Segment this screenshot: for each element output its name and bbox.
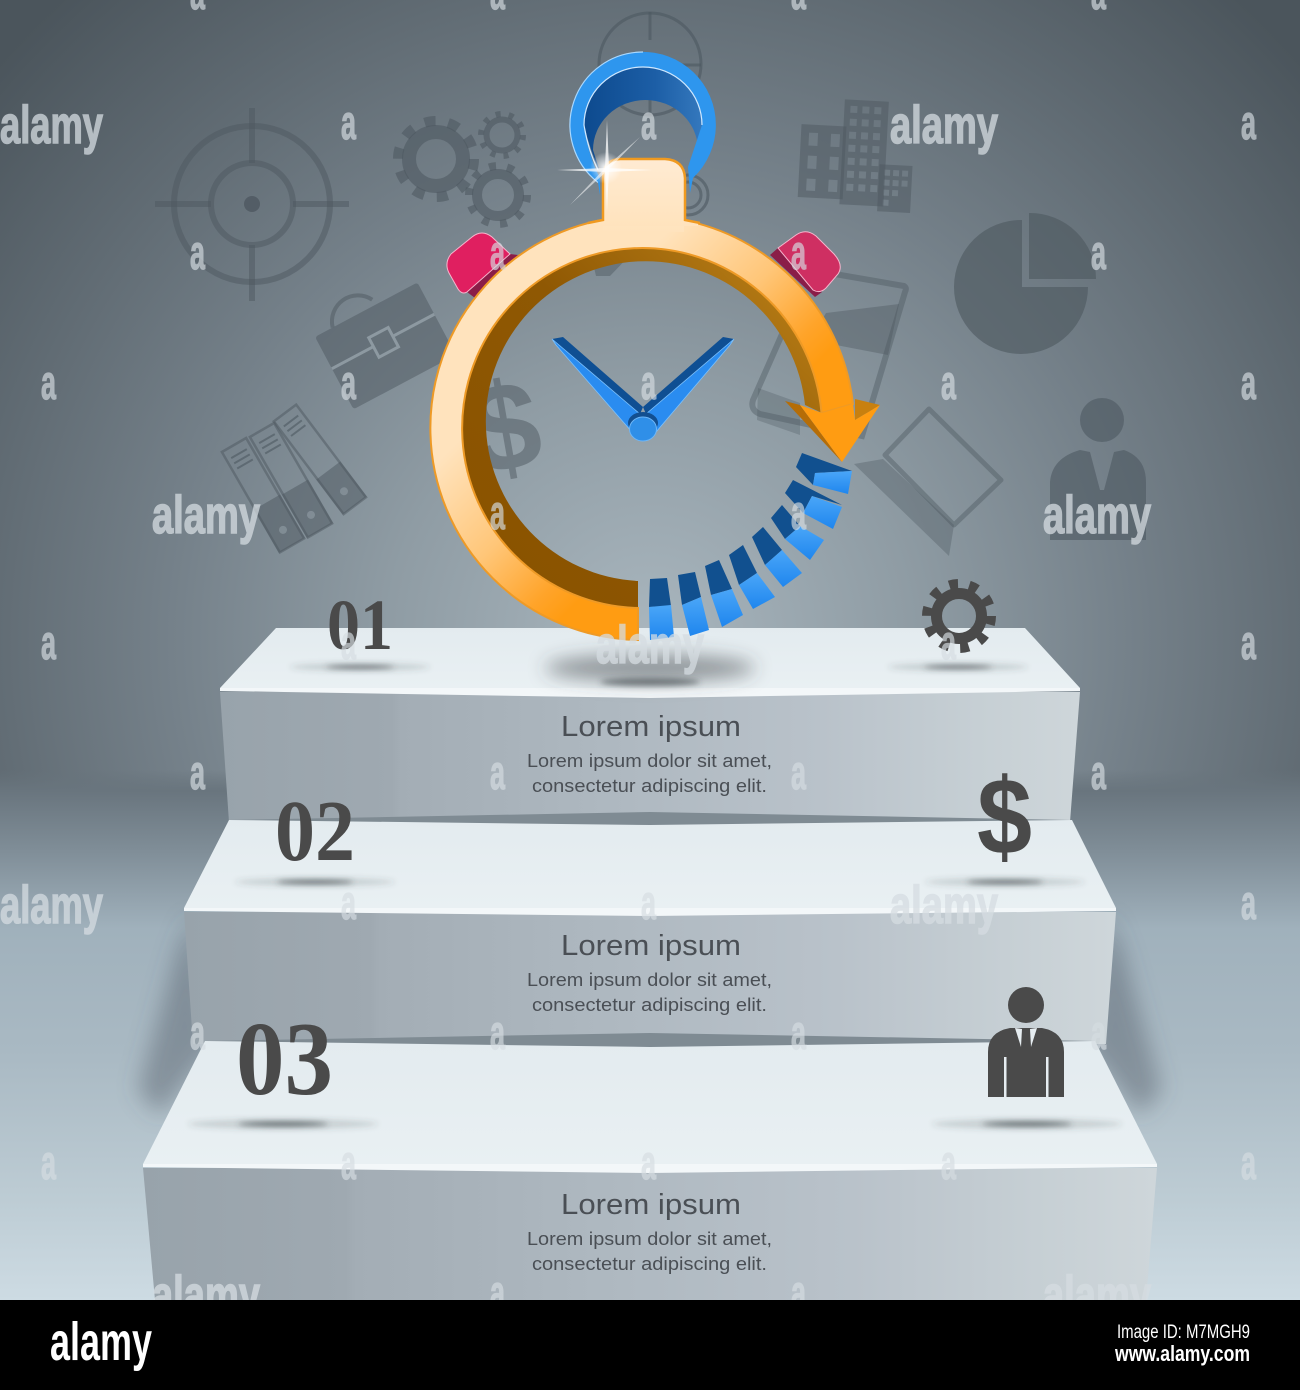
icon: target	[155, 108, 349, 301]
text block: step 3	[527, 1189, 772, 1274]
stem	[588, 159, 700, 232]
icon: gear on step 1	[928, 585, 990, 647]
text block: step 3: Lorem ipsum dolor sit amet,	[527, 1228, 772, 1249]
watermark wordmarks	[0, 96, 1151, 1325]
watermark small letters: a	[41, 357, 56, 410]
watermark small letters: a	[941, 357, 956, 410]
watermark wordmarks: alamy	[890, 876, 998, 935]
watermark small letters: a	[1091, 1007, 1106, 1060]
watermark small letters: a	[341, 877, 356, 930]
step 1	[220, 628, 1080, 822]
ring inner wall	[463, 248, 822, 608]
numeral 02: 02	[275, 782, 355, 879]
ring front face	[430, 216, 853, 640]
watermark small letters: a	[1241, 97, 1256, 150]
watermark small letters: a	[941, 1137, 956, 1190]
watermark small letters: a	[791, 487, 806, 540]
icon: pie chart	[954, 213, 1096, 354]
background floor	[0, 770, 1300, 1300]
soft shadows on treads	[188, 654, 1122, 1129]
icon: dollar on step 2: $	[977, 756, 1032, 878]
clock hands	[552, 337, 734, 441]
icon: businessman faded	[1050, 398, 1146, 540]
watermark small letters: a	[490, 1267, 505, 1320]
stopwatch crown	[570, 52, 716, 195]
watermark wordmarks: alamy	[152, 486, 260, 545]
watermark small letters: a	[41, 1137, 56, 1190]
footer url: www.alamy.com	[1114, 1341, 1250, 1366]
watermark small letters: a	[641, 1137, 656, 1190]
watermark wordmarks: alamy	[1043, 1266, 1151, 1325]
text block: step 2: consectetur adipiscing elit.	[532, 994, 767, 1015]
step 3 front face	[143, 1168, 1157, 1300]
watermark small letters: a	[1241, 1137, 1256, 1190]
watermark small letters: a	[641, 97, 656, 150]
step 2 front face	[184, 912, 1116, 1044]
footer logo: alamy	[50, 1312, 152, 1372]
watermark small letters: a	[341, 617, 356, 670]
watermark wordmarks: alamy	[890, 96, 998, 155]
text block: step 2	[527, 930, 772, 1015]
text block: step 3: Lorem ipsum	[561, 1189, 741, 1221]
watermark wordmarks: alamy	[0, 876, 103, 935]
watermark small letters: a	[190, 1007, 205, 1060]
stair side shadows	[138, 915, 1162, 1115]
watermark small letters: a	[1241, 357, 1256, 410]
watermark small letters: a	[1091, 747, 1106, 800]
icon: top target behind crown	[599, 12, 708, 215]
text block: step 2: Lorem ipsum	[561, 930, 741, 962]
watermark small letters: a	[490, 487, 505, 540]
sparkle	[557, 120, 653, 212]
watermark small letters: a	[341, 357, 356, 410]
watermark wordmarks: alamy	[1043, 486, 1151, 545]
arrow head	[785, 399, 880, 462]
icon: tablet	[752, 268, 906, 436]
watermark small letters: a	[490, 747, 505, 800]
text block: step 1: Lorem ipsum dolor sit amet,	[527, 750, 772, 771]
watermark wordmarks: alamy	[596, 616, 704, 675]
watermark small letters: a	[1241, 877, 1256, 930]
watermark small letters: a	[341, 1137, 356, 1190]
step 3 tread	[143, 1041, 1157, 1164]
left red button	[447, 233, 518, 298]
right red button	[770, 232, 840, 297]
watermark small letters: a	[190, 747, 205, 800]
faded background icons	[155, 12, 1146, 556]
icon: briefcase	[306, 265, 456, 409]
watermark wordmarks: alamy	[152, 1266, 260, 1325]
watermark small letters: a	[791, 227, 806, 280]
icon: laptop	[854, 409, 1001, 556]
icon: dollar behind clock: $	[458, 353, 551, 502]
footer image id: Image ID: M7MGH9	[1117, 1322, 1250, 1343]
text block: step 3: consectetur adipiscing elit.	[532, 1253, 767, 1274]
watermark small letters: a	[1091, 227, 1106, 280]
watermark small letters: a	[490, 227, 505, 280]
watermark small letters: a	[641, 877, 656, 930]
numeral 01: 01	[327, 585, 393, 665]
step 1 front face	[220, 692, 1080, 822]
watermark small letters: a	[791, 1007, 806, 1060]
small shape under ring	[590, 250, 635, 276]
stopwatch	[430, 52, 880, 640]
numeral 03: 03	[236, 1000, 333, 1117]
footer bar	[0, 1300, 1300, 1390]
watermark small letters: a	[791, 1267, 806, 1320]
watermark small letters: a	[490, 1007, 505, 1060]
watermark small letters: a	[41, 617, 56, 670]
text block: step 1: Lorem ipsum	[561, 711, 741, 743]
watermark small letters: a	[641, 357, 656, 410]
step 1 tread	[220, 628, 1080, 688]
watermark small letters: a	[190, 227, 205, 280]
step 2	[184, 812, 1116, 1044]
watermark small letters: a	[941, 617, 956, 670]
watermark wordmarks: alamy	[0, 96, 103, 155]
icon: gears	[398, 114, 527, 224]
icon: binders	[221, 404, 367, 553]
step 2 tread	[184, 820, 1116, 908]
icon: buildings	[797, 97, 916, 213]
text block: step 2: Lorem ipsum dolor sit amet,	[527, 969, 772, 990]
watermark small letters: a	[341, 97, 356, 150]
blue segmented arc	[649, 453, 852, 640]
watermark small letters: a	[1241, 617, 1256, 670]
icon: businessman on step 3	[988, 987, 1064, 1097]
step 3	[143, 1033, 1157, 1300]
watermark small letters: a	[791, 747, 806, 800]
text block: step 1: consectetur adipiscing elit.	[532, 775, 767, 796]
text block: step 1	[527, 711, 772, 796]
